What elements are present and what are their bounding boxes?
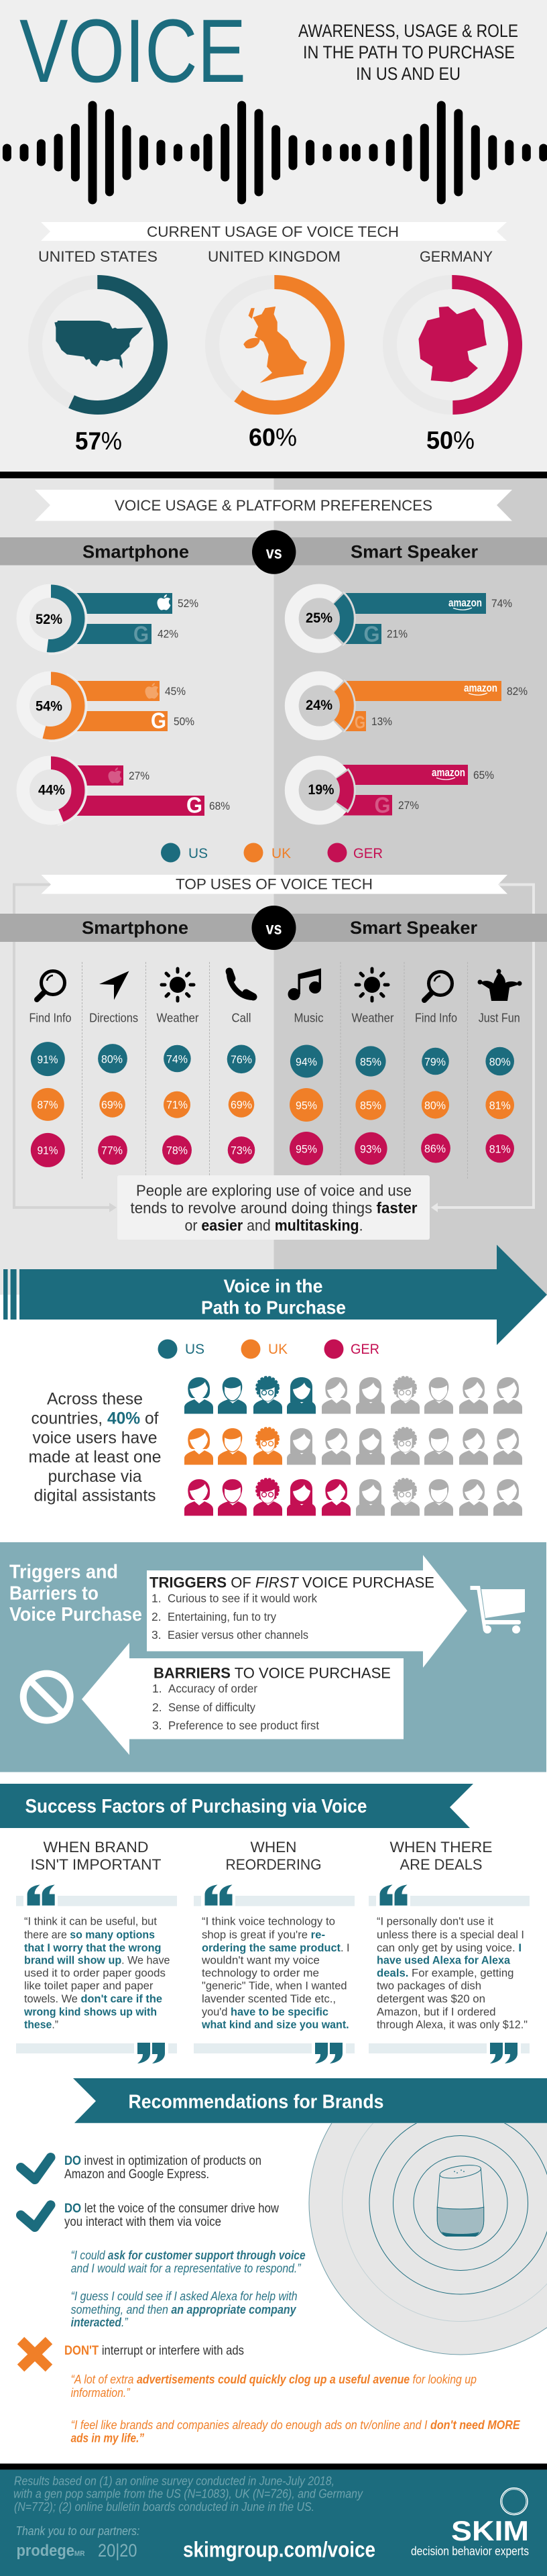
percent bubbles: Germany row: 91% [38, 1144, 58, 1157]
percent bubbles: Germany row: 73% [231, 1144, 252, 1157]
donut: United Kingdom 60% [212, 282, 338, 451]
banner: recommendations for brands [73, 2078, 547, 2123]
black divider bar [0, 472, 547, 478]
legend 2: GER [351, 1342, 379, 1357]
use labels: Weather [157, 1011, 199, 1024]
smartphone bars: UK: G [151, 708, 166, 733]
heading: triggers and barriers: Barriers to [9, 1582, 99, 1604]
smart speaker bars: Germany: G [374, 793, 390, 817]
smart speaker bars: Germany [269, 740, 494, 841]
legend 1: US [188, 846, 208, 861]
smartphone bars: US: 52% [36, 612, 62, 627]
column: when brand isn't important: like toilet paper and paper [24, 1979, 154, 1992]
methodology note [13, 2474, 363, 2514]
column: when reordering: ordering the same product. I [202, 1941, 350, 1954]
use labels: Just Fun [479, 1011, 520, 1024]
comparison band 2: Smartphone [82, 918, 188, 938]
icon: phone call [229, 971, 253, 998]
smart speaker bars: UK: amazon [464, 682, 497, 694]
icon: find info magnifier [37, 971, 64, 1000]
ribbon: current usage of voice tech: CURRENT USAGE OF VOICE TECH [147, 223, 399, 240]
people row: US 4 of 10 [184, 1377, 522, 1414]
use labels: Find Info [29, 1011, 71, 1024]
use labels: Weather [351, 1011, 394, 1024]
quotes: do: something, and then an appropriate company [71, 2303, 296, 2316]
panel: triggers and barriers [0, 1542, 546, 1772]
text: across these countries: Across these [47, 1390, 143, 1409]
arrow: barriers to voice purchase: 2. [152, 1701, 162, 1714]
partners: prodegeMR [16, 2542, 85, 2560]
smartphone bars: Germany: 44% [38, 783, 65, 798]
column: when there are deals [369, 1839, 530, 2063]
arrow: barriers to voice purchase: 3. [152, 1719, 162, 1732]
column: when there are deals: can only get by using voice. I [377, 1941, 522, 1954]
callout: exploring use of voice: or easier and multitasking. [185, 1217, 363, 1234]
section arrow: voice in the path to purchase: Path to Purchase [201, 1297, 346, 1318]
arrow: barriers to voice purchase: BARRIERS TO VOICE PURCHASE [154, 1665, 391, 1682]
logo: SKIM [411, 2488, 529, 2558]
heading: triggers and barriers: Voice Purchase [9, 1604, 142, 1625]
smart speaker bars: UK [269, 655, 528, 757]
comparison band 1: Smart Speaker [351, 542, 478, 562]
logo: SKIM: SKIM [451, 2515, 529, 2546]
text: do invest: Amazon and Google Express. [64, 2167, 209, 2182]
percent bubbles: Germany row: 86% [424, 1142, 446, 1155]
column: when there are deals: two packages of dish [377, 1979, 481, 1992]
arrow: barriers to voice purchase: 1. [152, 1682, 162, 1695]
bracket arrow: left [14, 885, 117, 1212]
column: when reordering: REORDERING [225, 1856, 322, 1873]
column: when there are deals: detergent was $20 on [377, 1992, 485, 2005]
smartphone bars: UK: 50% [174, 715, 194, 728]
percent bubbles: Germany row: 95% [296, 1143, 317, 1155]
smartphone bars: Germany: 68% [209, 800, 230, 812]
legend 1: GER [353, 846, 383, 861]
column: when there are deals: “I personally don't use it [377, 1915, 493, 1927]
icon: smart speaker [437, 2163, 484, 2237]
column: when brand isn't important: WHEN BRAND [43, 1839, 149, 1856]
text: do let the voice: DO let the voice of the consumer drive how [64, 2202, 279, 2216]
title: VOICE [19, 1, 246, 101]
arrow: triggers of first voice purchase: 1. [151, 1591, 162, 1605]
smartphone bars: UK: 45% [165, 685, 186, 698]
percent bubbles: UK row: 87% [38, 1099, 58, 1111]
column: when reordering: what kind and size you want. [201, 2019, 349, 2031]
column: when there are deals: have used Alexa for Alexa [377, 1954, 511, 1967]
percent bubbles: US row: 94% [296, 1056, 317, 1068]
percent bubbles: UK row: 85% [360, 1099, 381, 1112]
country labels: UNITED STATES [38, 248, 158, 265]
callout: exploring use of voice: tends to revolve around doing things faster [130, 1199, 418, 1217]
people row: Germany 5 of 10 [184, 1479, 522, 1516]
smart speaker bars: UK: G [355, 712, 365, 733]
smart speaker bars: UK: 82% [507, 685, 528, 698]
smart speaker bars: US: 25% [306, 610, 332, 626]
percent bubbles: Germany row: 77% [101, 1144, 123, 1157]
country labels [38, 248, 493, 265]
percent bubbles: US row [31, 1042, 514, 1077]
text: do invest: DO invest in optimization of products on [64, 2154, 261, 2168]
percent bubbles: UK row: 81% [489, 1099, 511, 1112]
methodology note: Results based on (1) an online survey conducted in June-July 2018, [14, 2474, 335, 2487]
comparison band 2 [0, 906, 547, 950]
callout: exploring use of voice [117, 1175, 430, 1240]
icon: just fun jester hat [477, 969, 522, 1001]
text: do let the voice [64, 2202, 279, 2229]
text: across these countries: digital assistants [34, 1487, 156, 1505]
subtitle [298, 21, 518, 84]
subtitle: IN US AND EU [356, 64, 461, 84]
smart speaker bars: UK: 13% [371, 715, 392, 728]
icon: check mark [21, 2157, 51, 2180]
country labels: UNITED KINGDOM [208, 248, 341, 265]
ribbon: voice usage and platform preferences: VOICE USAGE & PLATFORM PREFERENCES [115, 497, 432, 514]
value: 60%: 60% [249, 424, 297, 451]
quotes: don't: ads in my life.” [71, 2432, 144, 2445]
percent bubbles: UK row: 69% [101, 1099, 123, 1111]
smartphone bars: UK [4, 658, 194, 753]
text: across these countries [28, 1390, 161, 1505]
arrow: barriers to voice purchase [82, 1643, 404, 1755]
smart speaker bars: US: 74% [491, 597, 512, 610]
column: when there are deals: WHEN THERE [390, 1839, 492, 1856]
section arrow: voice in the path to purchase: Voice in the [224, 1276, 323, 1296]
column: when brand isn't important: “I think it can be useful, but [24, 1915, 157, 1927]
column: when reordering: technology to order me [202, 1967, 319, 1979]
concentric sound rings [308, 2123, 547, 2355]
column: when brand isn't important: these.” [24, 2019, 58, 2031]
use labels: Find Info [415, 1011, 457, 1024]
percent bubbles: UK row: 95% [296, 1099, 317, 1112]
partners [15, 2524, 139, 2561]
banner: success factors: Success Factors of Purchasing via Voice [25, 1796, 367, 1817]
white background below [0, 1295, 547, 1542]
value: 50%: 50% [426, 427, 475, 454]
value: 57%: 57% [75, 427, 122, 455]
heading: triggers and barriers: Triggers and [9, 1562, 118, 1583]
smart speaker bars: US: amazon [448, 596, 482, 609]
quotes: don't [71, 2373, 520, 2445]
heading: triggers and barriers [9, 1562, 142, 1625]
quotes: don't: information.” [71, 2386, 130, 2400]
smart speaker bars: Germany: 65% [473, 769, 494, 782]
legend 1 [161, 843, 383, 863]
column: when reordering: wouldn't want my voice [201, 1954, 320, 1967]
smartphone bars: US: 52% [178, 597, 198, 610]
comparison band 2: vs [265, 918, 282, 938]
arrow: triggers of first voice purchase: 2. [151, 1610, 162, 1623]
percent bubbles: US row: 91% [38, 1053, 58, 1066]
methodology note: with a gen pop sample from the US (N=1083), UK (N=726), and Germany [13, 2487, 363, 2501]
column: when brand isn't important: used it to order paper goods [24, 1967, 166, 1979]
column: when brand isn't important: ISN'T IMPORTANT [31, 1856, 161, 1873]
arrow: triggers of first voice purchase: 3. [151, 1628, 162, 1642]
quotes: don't: “I feel like brands and companies already do enough ads on tv/online and I don't need MORE [71, 2418, 520, 2432]
column: when there are deals: through Alexa, it was only $12." [377, 2019, 528, 2031]
map: United Kingdom [243, 307, 307, 383]
donut: United States 57% [35, 282, 161, 455]
column: when reordering: “I think voice technology to [202, 1915, 335, 1927]
icon: weather sun [162, 969, 194, 1001]
smart speaker bars: Germany: 27% [398, 799, 419, 812]
column: when there are deals: unless there is a special deal I [377, 1929, 524, 1941]
smart speaker bars: Germany: 19% [308, 782, 335, 798]
comparison band 1: Smartphone [82, 542, 189, 562]
column: when reordering: you'd have to be specific [202, 2005, 328, 2018]
column: when reordering: shop is great if you're re- [202, 1929, 325, 1941]
quotes: do: and I would wait for a representative to respond.” [71, 2262, 301, 2275]
use labels: Music [294, 1011, 323, 1024]
arrow: triggers of first voice purchase [147, 1555, 467, 1668]
smartphone bars: US [4, 571, 198, 666]
icon: check mark [21, 2205, 51, 2227]
arrow: triggers of first voice purchase: TRIGGERS OF FIRST VOICE PURCHASE [149, 1574, 434, 1591]
text: across these countries: voice users have [32, 1429, 157, 1448]
column: when reordering: "generic" Tide, when I wanted [202, 1979, 347, 1992]
icon: orange x [21, 2341, 49, 2368]
column: when reordering: lavender scented Tide etc., [202, 1992, 336, 2005]
column: when brand isn't important: wrong kind shows up with [23, 2005, 157, 2018]
quotes: do: “I could ask for customer support through voice [71, 2249, 306, 2262]
text: across these countries: countries, 40% of [32, 1409, 159, 1428]
banner: recommendations for brands: Recommendations for Brands [129, 2092, 383, 2113]
background: header section [0, 0, 547, 472]
percent bubbles: UK row: 71% [166, 1099, 188, 1111]
column: when there are deals: ARE DEALS [400, 1856, 483, 1873]
percent bubbles: Germany row: 81% [489, 1143, 511, 1155]
percent bubbles: US row: 79% [424, 1056, 446, 1068]
use labels: Directions [89, 1011, 138, 1024]
icon: directions arrow [99, 971, 129, 1000]
smartphone bars: US: G [133, 621, 149, 647]
quotes: do: interacted.” [71, 2316, 128, 2329]
subtitle: AWARENESS, USAGE & ROLE [298, 21, 518, 41]
quotes: do [71, 2249, 306, 2329]
smart speaker bars: US [269, 568, 512, 669]
ribbon: current usage of voice tech [41, 222, 507, 241]
column: when brand isn't important [16, 1839, 177, 2063]
percent bubbles: Germany row [31, 1132, 514, 1167]
icon: weather sun [356, 969, 388, 1001]
smart speaker bars: Germany: amazon [432, 766, 465, 779]
smartphone bars: Germany [4, 743, 230, 838]
partners: Thank you to our partners: [15, 2524, 139, 2538]
website link: skimgroup.com/voice [183, 2537, 375, 2561]
percent bubbles: US row: 74% [166, 1053, 188, 1065]
banner: success factors [0, 1784, 473, 1828]
arrow: barriers to voice purchase: Accuracy of order [168, 1682, 257, 1695]
percent bubbles: UK row: 69% [231, 1099, 252, 1111]
text: do invest [64, 2154, 261, 2182]
smartphone bars: UK: 54% [36, 699, 62, 714]
arrow: triggers of first voice purchase: Curious to see if it would work [168, 1591, 317, 1605]
column: when there are deals: Amazon, but if I ordered [377, 2005, 496, 2018]
icon: shopping cart [471, 1586, 525, 1633]
text: across these countries: purchase via [48, 1467, 142, 1486]
partners: 20|20 [98, 2540, 137, 2561]
ribbon: voice usage and platform preferences [35, 490, 512, 521]
icon: find info magnifier [424, 971, 452, 1000]
icon: prohibition sign [23, 1674, 70, 1721]
legend 2 [158, 1339, 379, 1359]
percent bubbles: UK row [32, 1088, 514, 1122]
column: when brand isn't important: there are so many options [24, 1929, 155, 1941]
smart speaker bars: UK: 24% [306, 698, 332, 713]
text: do let the voice: you interact with them via voice [64, 2215, 221, 2229]
black footer divider [0, 2463, 547, 2470]
background: smartphone side [0, 478, 274, 1295]
ribbon: top uses of voice tech [41, 875, 507, 894]
smart speaker bars: US: 21% [387, 628, 408, 640]
quotes: do: “I guess I could see if I asked Alexa for help with [71, 2290, 298, 2303]
column: when brand isn't important: towels. We don't care if the [24, 1992, 162, 2005]
donut: Germany 50% [390, 282, 515, 454]
legend 1: UK [271, 846, 291, 861]
arrow: triggers of first voice purchase: Easier versus other channels [168, 1628, 308, 1642]
column: when reordering [194, 1839, 355, 2063]
arrow: barriers to voice purchase: Sense of difficulty [168, 1701, 255, 1714]
logo: SKIM: decision behavior experts [411, 2544, 529, 2558]
percent bubbles: US row: 80% [101, 1053, 123, 1065]
percent bubbles: US row: 76% [231, 1053, 252, 1066]
percent bubbles: Germany row: 78% [166, 1144, 188, 1157]
comparison band 2: Smart Speaker [350, 918, 477, 938]
section arrow: voice in the path to purchase [3, 1245, 547, 1345]
smart speaker bars: US: G [363, 621, 379, 647]
percent bubbles: US row: 85% [360, 1056, 381, 1068]
use labels: Call [232, 1011, 251, 1024]
icon: music note [288, 969, 321, 1000]
methodology note: (N=772); (2) online bulletin boards conducted in June in the US. [14, 2500, 314, 2514]
comparison band 1 [0, 530, 547, 574]
quotes: don't: “A lot of extra advertisements could quickly clog up a useful avenue for looking up [71, 2373, 477, 2386]
percent bubbles: US row: 80% [489, 1056, 511, 1068]
arrow: barriers to voice purchase: Preference to see product first [168, 1719, 319, 1732]
footer panel [0, 2470, 547, 2576]
percent bubbles: UK row: 80% [424, 1099, 446, 1112]
ribbon: top uses of voice tech: TOP USES OF VOICE TECH [176, 876, 373, 893]
subtitle: IN THE PATH TO PURCHASE [303, 42, 515, 62]
arrow: triggers of first voice purchase: Entertaining, fun to try [168, 1610, 276, 1623]
comparison band 1: vs [266, 543, 282, 563]
country labels: GERMANY [420, 248, 493, 265]
map: United States [54, 321, 143, 368]
text: across these countries: made at least one [28, 1448, 161, 1466]
legend 2: UK [268, 1342, 288, 1357]
map: Germany [418, 307, 487, 382]
background: smart speaker side [274, 478, 547, 1295]
waveform [7, 105, 544, 200]
column: when reordering: WHEN [251, 1839, 296, 1856]
smartphone bars: Germany: G [186, 793, 202, 817]
text: don't interrupt: DON'T interrupt or interfere with ads [64, 2344, 244, 2358]
bracket arrow: right [431, 885, 534, 1212]
people row: UK 3 of 10 [184, 1428, 522, 1465]
legend 2: US [185, 1342, 204, 1357]
use labels [29, 1011, 520, 1024]
smartphone bars: US: 42% [158, 628, 178, 640]
percent bubbles: Germany row: 93% [360, 1143, 381, 1155]
column: when brand isn't important: brand will show up. We have [24, 1954, 170, 1967]
smartphone bars: Germany: 27% [129, 769, 149, 782]
callout: exploring use of voice: People are exploring use of voice and use [136, 1181, 412, 1199]
column: when there are deals: deals. For example, getting [377, 1967, 513, 1979]
column: when brand isn't important: that I worry that the wrong [24, 1941, 161, 1954]
